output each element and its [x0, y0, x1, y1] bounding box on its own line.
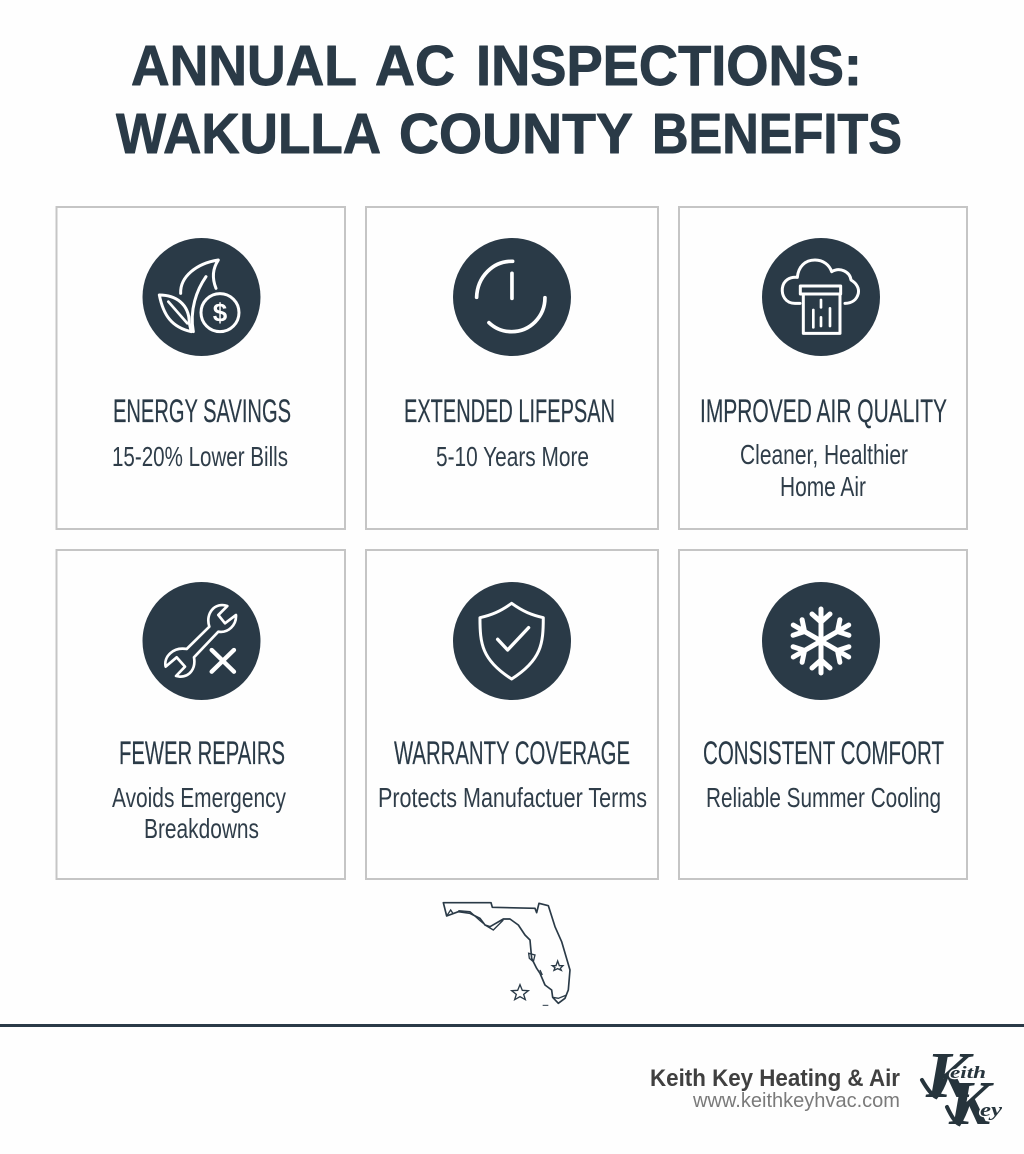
- title: WAKULLA: [116, 102, 381, 166]
- panel: improved air quality: [679, 207, 967, 529]
- text: avoids emergency breakdowns: Breakdowns: [144, 813, 259, 844]
- logo: keith key script mark: K: [925, 1039, 974, 1112]
- text: cleaner healthier home air: Home Air: [780, 471, 866, 502]
- icon: cloud and air filter: [762, 238, 880, 356]
- icon: leaves and dollar coin: [142, 238, 260, 356]
- title: ANNUAL: [131, 34, 357, 98]
- text: avoids emergency breakdowns: [112, 782, 286, 844]
- logo: keith key script mark: eith: [950, 1063, 986, 1082]
- text: lower bills: 15-20% Lower Bills: [112, 441, 288, 472]
- icon: shield with check: [453, 582, 571, 700]
- title: COUNTY: [399, 102, 633, 166]
- text: protects manufacturer terms: Protects Manufactuer Terms: [378, 782, 647, 813]
- title: BENEFITS: [652, 102, 902, 166]
- heading: extended lifespan: EXTENDED LIFEPSAN: [404, 393, 615, 429]
- panel: extended lifespan: [366, 207, 658, 529]
- heading: warranty coverage: WARRANTY COVERAGE: [394, 735, 630, 771]
- logo: keith key script mark: K: [948, 1070, 994, 1138]
- panel: warranty coverage: [366, 550, 658, 879]
- text: cleaner healthier home air: [740, 439, 908, 502]
- logo: keith key script mark: [922, 1039, 1003, 1138]
- logo: keith key script mark: ey: [980, 1100, 1003, 1121]
- title: AC: [375, 34, 455, 98]
- icon: leaves and dollar coin: $: [213, 298, 228, 328]
- footer: company name and url: Keith Key Heating & Air: [650, 1065, 900, 1092]
- map: florida outline with stars: [443, 903, 570, 1005]
- panel: consistent comfort: [679, 550, 967, 879]
- text: cleaner healthier home air: Cleaner, Healthier: [740, 439, 908, 470]
- footer: company name and url: www.keithkeyhvac.com: [692, 1090, 900, 1112]
- text: avoids emergency breakdowns: Avoids Emergency: [112, 782, 286, 813]
- text: reliable summer cooling: Reliable Summer Cooling: [706, 782, 941, 813]
- icon: power dial: [453, 238, 571, 356]
- heading: fewer repairs: FEWER REPAIRS: [119, 735, 285, 771]
- title: INSPECTIONS:: [476, 34, 862, 98]
- icon: snowflake: [762, 582, 880, 700]
- footer divider: [0, 1024, 1024, 1027]
- heading: energy savings: ENERGY SAVINGS: [113, 393, 291, 429]
- footer: company name and url: [650, 1065, 900, 1112]
- text: years more: 5-10 Years More: [436, 441, 589, 472]
- panel: fewer repairs: [56, 550, 345, 879]
- panel: energy savings: [56, 207, 345, 529]
- title: [116, 34, 902, 166]
- icon: wrench and cross: [142, 582, 260, 700]
